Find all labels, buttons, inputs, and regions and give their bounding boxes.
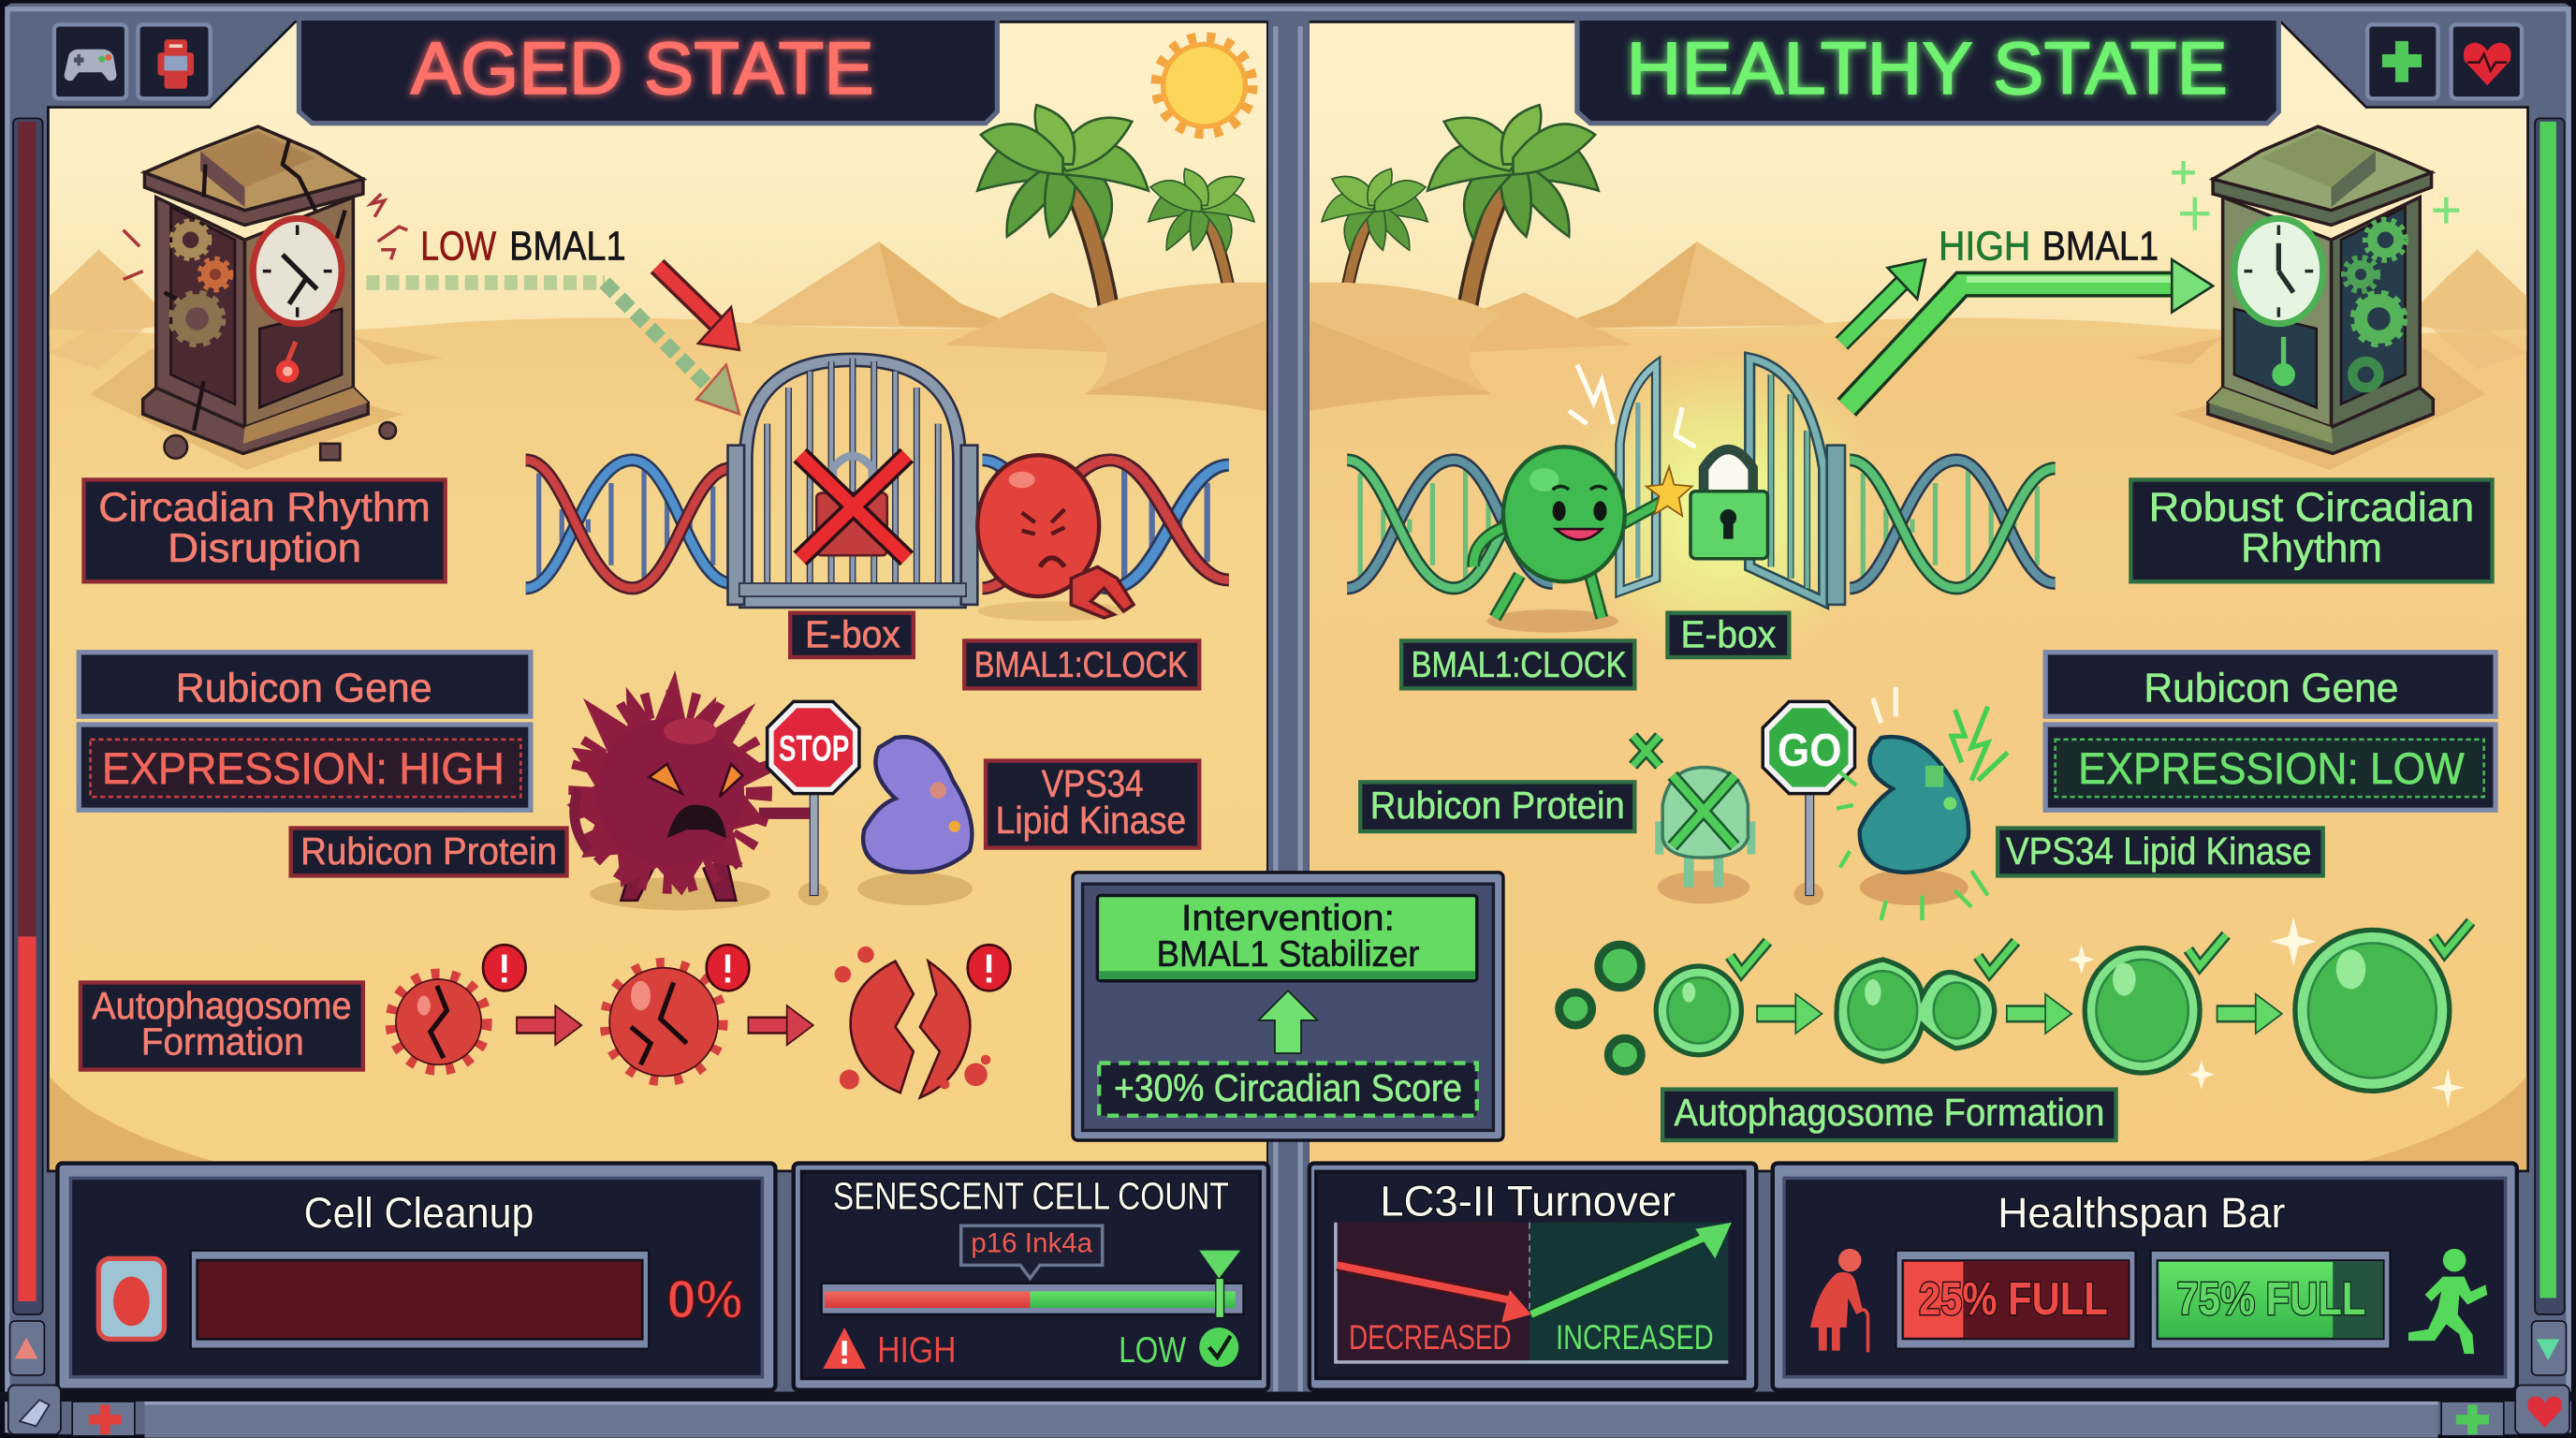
panel: aged state desert background <box>33 23 1266 1170</box>
high status: HIGH <box>877 1330 956 1371</box>
cracked aged clock tower <box>124 126 407 460</box>
open e-box gate <box>1620 359 1845 605</box>
sparkles <box>2069 917 2465 1108</box>
stop sign <box>768 701 859 905</box>
vesicle stage one <box>1656 966 1741 1055</box>
check marks <box>1730 922 2471 973</box>
panel: senescent cell count <box>794 1164 1268 1390</box>
icon: green plus button <box>2367 24 2438 98</box>
broken cell medium <box>605 962 723 1081</box>
closed e-box gate <box>728 359 977 605</box>
right gate leaf <box>1749 359 1845 605</box>
label: robust circadian rhythm: Robust Circadian <box>2149 484 2474 530</box>
panel: healthspan bar: Healthspan Bar <box>1998 1189 2285 1237</box>
label: expression high: EXPRESSION: HIGH <box>102 744 505 794</box>
panel: cell cleanup: 0% <box>667 1270 742 1330</box>
left gate leaf <box>1620 365 1656 592</box>
icon: sun <box>1157 37 1251 133</box>
icon: heart monitor button <box>2452 24 2522 98</box>
label: e-box aged: E-box <box>805 612 900 655</box>
dna helix left healthy <box>1347 460 1553 588</box>
label: robust circadian rhythm <box>2130 479 2492 581</box>
red padlock <box>816 456 887 555</box>
bottom status bar <box>0 1392 2576 1438</box>
label: rubicon protein aged: Rubicon Protein <box>300 829 557 873</box>
glow behind open gate <box>1569 353 1881 666</box>
label: circadian rhythm disruption <box>84 479 446 581</box>
icon: green plus status <box>2441 1401 2504 1436</box>
label: bmal1 clock aged: BMAL1:CLOCK <box>974 645 1188 685</box>
vesicle fusion stage <box>1837 960 1995 1062</box>
broken cell small <box>391 975 487 1070</box>
arrow: green bmal1 signal <box>1847 259 2213 407</box>
label: autophagosome formation aged <box>80 983 363 1070</box>
intervention button <box>1097 895 1477 981</box>
go sign: GO <box>1778 726 1841 776</box>
open padlock <box>1690 449 1767 559</box>
alert badges <box>483 945 1010 990</box>
robust healthy clock tower <box>2172 126 2459 453</box>
aged healthspan bar <box>1895 1251 2136 1349</box>
red process arrows <box>516 1005 813 1045</box>
healthy healthspan bar <box>2150 1251 2391 1349</box>
green process arrows <box>1756 994 2282 1034</box>
panel: senescent cell count: SENESCENT CELL COUNT <box>833 1175 1229 1218</box>
title: healthy state: HEALTHY STATE <box>1627 27 2228 110</box>
icon: gamepad button <box>54 24 126 98</box>
p16 tag <box>961 1225 1103 1278</box>
healthy healthspan bar: 75% FULL <box>2177 1274 2365 1325</box>
label: robust circadian rhythm: Rhythm <box>2241 525 2382 571</box>
dna helix left aged <box>526 460 731 588</box>
healthy clock face <box>2234 218 2323 324</box>
panel: intervention <box>1073 873 1503 1140</box>
panel: lc3-ii turnover <box>1310 1164 1756 1390</box>
circadian score readout: +30% Circadian Score <box>1114 1066 1462 1109</box>
high status <box>823 1328 956 1371</box>
icon: red smartwatch button <box>138 24 211 98</box>
line chart: INCREASED <box>1556 1318 1714 1357</box>
label: rubicon gene healthy: Rubicon Gene <box>2144 665 2398 711</box>
intervention button: BMAL1 Stabilizer <box>1157 934 1420 975</box>
left status track <box>13 118 43 1314</box>
icon: empty battery capsule <box>98 1258 165 1339</box>
label: expression high <box>79 725 531 810</box>
increased line <box>1531 1223 1732 1314</box>
title: aged state <box>299 18 997 124</box>
title: healthy state <box>1577 18 2278 124</box>
button: up triangle <box>10 1321 44 1375</box>
icon: red heart status <box>2515 1385 2569 1434</box>
label: e-box healthy: E-box <box>1680 612 1776 655</box>
label: high bmal1: HIGH <box>1939 223 2030 269</box>
label: vps34 lipid kinase healthy: VPS34 Lipid Kinase <box>2006 829 2311 873</box>
label: bmal1 clock healthy: BMAL1:CLOCK <box>1412 645 1627 685</box>
intervention button: Intervention: <box>1181 898 1395 938</box>
button: down triangle <box>2532 1321 2566 1375</box>
label: expression low: EXPRESSION: LOW <box>2078 744 2465 794</box>
gears on healthy clock <box>2345 220 2405 388</box>
stop sign: STOP <box>779 729 849 770</box>
mature autophagosome <box>2295 930 2450 1091</box>
panel: cell cleanup <box>57 1164 775 1390</box>
dna helix right healthy <box>1850 460 2056 588</box>
label: rubicon gene aged: Rubicon Gene <box>176 665 432 711</box>
label: low bmal1: LOW <box>420 223 497 269</box>
arrow: faded dashed signal <box>366 283 739 414</box>
failing autophagosome sequence <box>391 945 1010 1097</box>
vps34 kinase active teal <box>1837 687 2008 920</box>
label: high bmal1 <box>1939 223 2159 269</box>
icon: elderly figure <box>1810 1249 1868 1352</box>
dna helix right aged <box>983 460 1229 588</box>
label: vps34 lipid kinase aged <box>986 761 1199 848</box>
go sign <box>1763 701 1855 905</box>
healthy autophagosome sequence <box>1559 917 2471 1108</box>
small vesicles <box>1559 945 1641 1071</box>
vesicle stage three <box>2085 948 2200 1073</box>
senescent gauge <box>822 1251 1244 1318</box>
low status: LOW <box>1119 1330 1187 1371</box>
label: vps34 lipid kinase aged: Lipid Kinase <box>996 799 1186 842</box>
up arrow <box>1258 990 1318 1053</box>
label: high bmal1: BMAL1 <box>2042 223 2159 269</box>
label: autophagosome formation healthy: Autophagosome Formation <box>1674 1091 2104 1134</box>
p16 tag: p16 Ink4a <box>971 1227 1093 1258</box>
arrow: red downward <box>657 266 739 350</box>
shattered cell <box>835 946 990 1097</box>
label: circadian rhythm disruption: Disruption <box>168 525 361 571</box>
line chart: DECREASED <box>1349 1318 1512 1357</box>
title: aged state: AGED STATE <box>411 27 874 110</box>
panel: lc3-ii turnover: LC3-II Turnover <box>1380 1178 1676 1225</box>
label: autophagosome formation aged: Formation <box>141 1020 304 1064</box>
cracked clock face <box>253 218 342 324</box>
arrow: green upward small <box>1841 259 1925 344</box>
aged healthspan bar: 25% FULL <box>1919 1274 2108 1325</box>
vps34 kinase purple <box>857 737 973 905</box>
label: rubicon gene healthy <box>2045 653 2496 716</box>
weakened rubicon protein <box>1633 736 1751 903</box>
label: autophagosome formation aged: Autophagosome <box>92 984 352 1027</box>
cleanup progress bar <box>191 1251 649 1349</box>
panel: cell cleanup: Cell Cleanup <box>304 1189 534 1237</box>
label: rubicon protein healthy: Rubicon Protein <box>1370 784 1625 827</box>
label: vps34 lipid kinase aged: VPS34 <box>1042 762 1144 805</box>
gears on cracked clock <box>172 222 230 344</box>
low status <box>1119 1328 1238 1371</box>
label: circadian rhythm disruption: Circadian Rhythm <box>98 484 431 530</box>
rubicon protein monster <box>567 670 813 910</box>
icon: running figure <box>2408 1249 2487 1354</box>
label: low bmal1 <box>420 223 626 269</box>
icon: red plus button <box>72 1401 135 1436</box>
sad bmal1 clock protein <box>977 455 1134 621</box>
panel: healthy state desert background <box>1310 23 2543 1170</box>
happy bmal1 clock protein <box>1473 365 1695 633</box>
right status track <box>2535 118 2565 1314</box>
label: rubicon gene aged <box>79 653 531 716</box>
panel: healthspan bar <box>1773 1164 2517 1390</box>
decreased line <box>1338 1265 1531 1323</box>
label: low bmal1: BMAL1 <box>509 223 626 269</box>
center divider <box>1268 11 1310 1397</box>
line chart <box>1336 1223 1732 1362</box>
label: expression low <box>2045 725 2496 810</box>
red x mark <box>800 455 907 559</box>
icon: wrench button <box>8 1385 61 1434</box>
